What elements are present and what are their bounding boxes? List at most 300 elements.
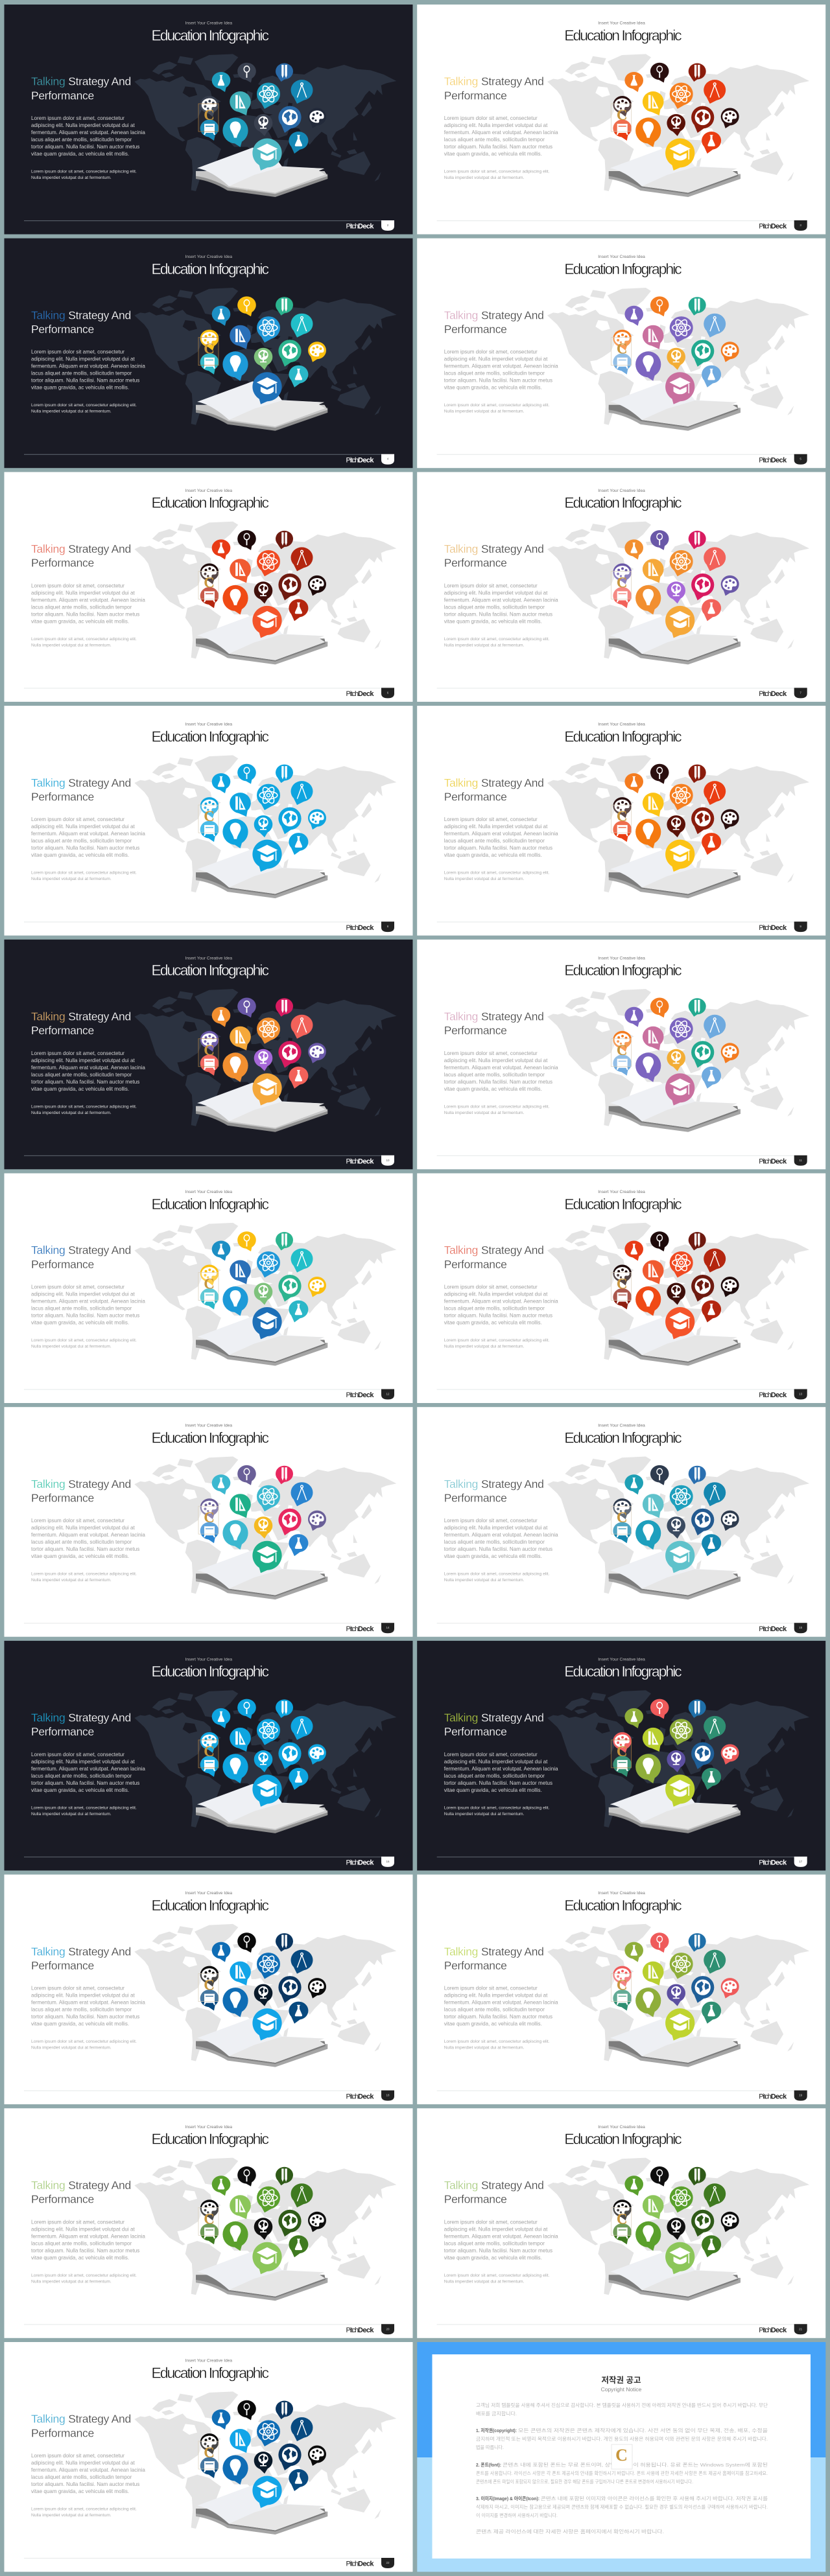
slide 8: white, red-yellow palette bbox=[417, 706, 825, 936]
icon: book bbox=[609, 849, 741, 898]
subheading: Performance bbox=[444, 1959, 507, 1972]
page badge bbox=[794, 2324, 807, 2334]
brand: Deck bbox=[771, 1625, 787, 1633]
slide 15: dark, sky blue palette bbox=[4, 1641, 412, 1870]
body text: adipiscing elit. Nulla imperdiet volutpat dui at bbox=[444, 1993, 548, 1999]
page badge bbox=[794, 922, 807, 932]
icon: compass bbox=[704, 80, 726, 104]
icon: flask bbox=[624, 1240, 643, 1261]
icon: book bbox=[609, 2017, 741, 2067]
subheading: Performance bbox=[444, 1725, 507, 1738]
icon: small globe bbox=[667, 1049, 685, 1071]
title: Education Infographic bbox=[564, 2131, 682, 2148]
icon: palette bbox=[613, 1966, 632, 1987]
icon: graduation cap bbox=[252, 1541, 282, 1573]
icon: pencils bbox=[276, 998, 293, 1017]
body text: vitae quam gravida, ac vehicula elit mollis. bbox=[444, 1787, 542, 1793]
body text: vitae quam gravida, ac vehicula elit mollis. bbox=[444, 2021, 542, 2027]
icon: canvas bbox=[200, 2223, 219, 2244]
copyright clause 1: 법을 따릅니다. bbox=[476, 2444, 504, 2450]
body text: Lorem ipsum dolor sit amet, consectetur bbox=[444, 1986, 538, 1991]
body text: lacus aliquet ante mollis, sollicitudin tempor bbox=[31, 604, 132, 610]
watermark: C bbox=[204, 1743, 215, 1759]
note text: Nulla imperdiet volutpat dui at fermentum. bbox=[444, 2279, 525, 2284]
page badge bbox=[381, 688, 394, 698]
body text: fermentum. Aliquam erat volutpat. Aenean lacinia bbox=[444, 1766, 558, 1772]
watermark bbox=[198, 1506, 219, 1534]
icon: palette bbox=[613, 330, 632, 351]
watermark bbox=[611, 1039, 632, 1067]
icon: flask bbox=[212, 2176, 230, 2196]
page badge bbox=[794, 454, 807, 465]
icon: globe bbox=[278, 2443, 302, 2470]
page badge bbox=[381, 220, 394, 231]
icon: globe bbox=[278, 1509, 302, 1535]
icon: book bbox=[609, 615, 741, 664]
icon: graduation cap bbox=[665, 2242, 694, 2274]
icon: flask bbox=[624, 2176, 643, 2196]
page badge: 5 bbox=[800, 458, 801, 461]
body text: fermentum. Aliquam erat volutpat. Aenean lacinia bbox=[444, 364, 558, 369]
body text: adipiscing elit. Nulla imperdiet volutpat dui at bbox=[31, 122, 135, 128]
icon: ruler bbox=[230, 1260, 251, 1284]
body text: vitae quam gravida, ac vehicula elit mollis. bbox=[444, 1086, 542, 1092]
icon: ruler bbox=[643, 1962, 664, 1986]
icon: flask bbox=[624, 306, 643, 326]
page badge bbox=[794, 2091, 807, 2101]
body text: vitae quam gravida, ac vehicula elit mollis. bbox=[31, 385, 129, 391]
world map bbox=[134, 1457, 396, 1594]
icon: ruler bbox=[643, 793, 664, 817]
title: Education Infographic bbox=[564, 1429, 682, 1446]
watermark: C bbox=[204, 1275, 215, 1292]
footer rule bbox=[24, 2558, 394, 2559]
subheading: Strategy And bbox=[68, 1010, 131, 1023]
body text: vitae quam gravida, ac vehicula elit mollis. bbox=[444, 1319, 542, 1326]
world map bbox=[547, 1457, 809, 1594]
icon: bulb bbox=[222, 819, 248, 848]
icon: magnifier bbox=[650, 998, 669, 1017]
icon: palette right bbox=[721, 1043, 739, 1063]
icon: atom bbox=[670, 1485, 693, 1511]
page badge: 22 bbox=[386, 2561, 390, 2564]
subheading: Strategy And bbox=[481, 75, 544, 88]
watermark: C bbox=[204, 341, 215, 357]
brand: Pitch bbox=[346, 223, 359, 231]
title: Education Infographic bbox=[564, 1663, 682, 1680]
copyright clause 3 bbox=[476, 2496, 768, 2518]
watermark bbox=[198, 805, 219, 833]
brand: Pitch bbox=[346, 690, 359, 698]
icon: palette right bbox=[308, 1277, 326, 1297]
brand: Pitch bbox=[759, 1625, 772, 1633]
icon: flask lower bbox=[702, 599, 721, 621]
subheading: Talking bbox=[31, 75, 65, 88]
icon: canvas bbox=[613, 587, 632, 608]
note text: Lorem ipsum dolor sit amet, consectetur adipiscing elit. bbox=[31, 1104, 137, 1109]
footer rule bbox=[437, 1155, 807, 1156]
icon: small globe bbox=[667, 348, 685, 370]
icon: bulb bbox=[635, 351, 661, 381]
icon: canvas bbox=[200, 1990, 219, 2011]
page badge: 9 bbox=[800, 925, 801, 928]
brand: Pitch bbox=[346, 2093, 359, 2100]
icon: graduation cap bbox=[252, 2008, 282, 2041]
icon: pencils bbox=[276, 297, 293, 316]
brand: Pitch bbox=[346, 1859, 359, 1867]
icon: small globe bbox=[254, 1984, 272, 2006]
subheading: Performance bbox=[444, 1024, 507, 1037]
copyright clause 1 bbox=[476, 2428, 768, 2450]
icon: atom bbox=[257, 1953, 280, 1979]
body text: tortor aliquam. Nulla facilisi. Nam auctor metus bbox=[31, 144, 139, 150]
slide 16: dark, lime-coral palette bbox=[417, 1641, 825, 1870]
brand: Pitch bbox=[346, 1158, 359, 1166]
subheading: Performance bbox=[31, 1725, 94, 1738]
small heading: Insert Your Creative Idea bbox=[598, 1891, 645, 1896]
icon: canvas bbox=[613, 1288, 632, 1309]
icon: pencils bbox=[276, 1699, 293, 1718]
watermark: C bbox=[204, 574, 215, 590]
body text: tortor aliquam. Nulla facilisi. Nam auctor metus bbox=[444, 1079, 552, 1085]
small heading: Insert Your Creative Idea bbox=[185, 1657, 232, 1662]
subheading: Strategy And bbox=[68, 75, 131, 88]
title: Education Infographic bbox=[152, 1196, 268, 1213]
icon: compass bbox=[704, 1716, 726, 1740]
icon: palette bbox=[613, 2199, 632, 2220]
body text: fermentum. Aliquam erat volutpat. Aenean lacinia bbox=[31, 130, 145, 135]
icon: atom bbox=[257, 1719, 280, 1745]
brand: Deck bbox=[771, 456, 787, 464]
body text: lacus aliquet ante mollis, sollicitudin tempor bbox=[444, 1072, 545, 1078]
icon: compass bbox=[704, 1248, 726, 1273]
subheading: Performance bbox=[31, 557, 94, 570]
icon: palette right bbox=[308, 108, 326, 128]
icon: ruler bbox=[230, 91, 251, 115]
copyright clause 3: 이 이미지를 변경하여 사용하시기 바랍니다. bbox=[476, 2512, 558, 2518]
icon: pencils bbox=[276, 2400, 293, 2419]
icon: compass bbox=[290, 1716, 313, 1740]
body text: tortor aliquam. Nulla facilisi. Nam auctor metus bbox=[444, 1313, 552, 1318]
body text: fermentum. Aliquam erat volutpat. Aenean lacinia bbox=[31, 1766, 145, 1772]
body text: fermentum. Aliquam erat volutpat. Aenean lacinia bbox=[31, 831, 145, 837]
icon: magnifier bbox=[650, 63, 669, 83]
icon: pencils bbox=[689, 1232, 706, 1251]
subheading: Talking bbox=[31, 1478, 65, 1491]
icon: pencils bbox=[689, 297, 706, 316]
subheading: Talking bbox=[31, 1010, 65, 1023]
subheading: Talking bbox=[444, 542, 478, 555]
body text: Lorem ipsum dolor sit amet, consectetur bbox=[31, 1752, 124, 1758]
icon: compass bbox=[290, 80, 313, 104]
icon: graduation cap bbox=[252, 840, 282, 872]
icon: pencils bbox=[276, 64, 293, 82]
page badge bbox=[381, 2091, 394, 2101]
brand: Pitch bbox=[759, 2093, 772, 2100]
subheading: Performance bbox=[444, 1258, 507, 1271]
small heading: Insert Your Creative Idea bbox=[598, 1424, 645, 1428]
subheading: Performance bbox=[31, 1024, 94, 1037]
icon: canvas bbox=[613, 2223, 632, 2244]
body text: Lorem ipsum dolor sit amet, consectetur bbox=[31, 583, 124, 588]
icon: flask bbox=[624, 72, 643, 92]
footer rule bbox=[24, 688, 394, 689]
icon: graduation cap bbox=[252, 1307, 282, 1339]
icon: compass bbox=[290, 2183, 313, 2207]
icon: canvas bbox=[613, 1756, 632, 1777]
body text: Lorem ipsum dolor sit amet, consectetur bbox=[31, 115, 124, 121]
page badge: 4 bbox=[387, 458, 389, 461]
subheading: Performance bbox=[31, 790, 94, 803]
icon: magnifier bbox=[237, 530, 256, 550]
icon: globe bbox=[691, 1742, 714, 1769]
body text: tortor aliquam. Nulla facilisi. Nam auctor metus bbox=[444, 611, 552, 617]
body text: adipiscing elit. Nulla imperdiet volutpat dui at bbox=[31, 824, 135, 830]
brand: Pitch bbox=[759, 1859, 772, 1867]
icon: ruler bbox=[643, 91, 664, 115]
body text: vitae quam gravida, ac vehicula elit mollis. bbox=[31, 1787, 129, 1793]
body text: fermentum. Aliquam erat volutpat. Aenean lacinia bbox=[31, 2467, 145, 2473]
watermark bbox=[611, 571, 632, 599]
watermark bbox=[198, 1974, 219, 2002]
icon: compass bbox=[704, 1482, 726, 1506]
body text: tortor aliquam. Nulla facilisi. Nam auctor metus bbox=[31, 1313, 139, 1318]
subheading: Performance bbox=[31, 2426, 94, 2439]
body text: lacus aliquet ante mollis, sollicitudin tempor bbox=[31, 2007, 132, 2013]
watermark bbox=[611, 1506, 632, 1534]
body text: tortor aliquam. Nulla facilisi. Nam auctor metus bbox=[31, 1546, 139, 1552]
body text: Lorem ipsum dolor sit amet, consectetur bbox=[444, 1050, 538, 1056]
icon: graduation cap bbox=[665, 840, 694, 872]
body text: Lorem ipsum dolor sit amet, consectetur bbox=[444, 1518, 538, 1524]
body text: lacus aliquet ante mollis, sollicitudin tempor bbox=[31, 838, 132, 844]
icon: globe bbox=[278, 1041, 302, 1068]
body text: vitae quam gravida, ac vehicula elit mollis. bbox=[31, 151, 129, 157]
body text: lacus aliquet ante mollis, sollicitudin tempor bbox=[444, 1305, 545, 1312]
icon: book bbox=[609, 381, 741, 431]
note text: Lorem ipsum dolor sit amet, consectetur adipiscing elit. bbox=[444, 1572, 550, 1577]
subheading: Strategy And bbox=[68, 1478, 131, 1491]
icon: globe bbox=[278, 1275, 302, 1301]
subheading: Talking bbox=[31, 542, 65, 555]
small heading: Insert Your Creative Idea bbox=[185, 2125, 232, 2129]
icon: book bbox=[196, 849, 327, 898]
icon: bulb bbox=[635, 1052, 661, 1082]
watermark: C bbox=[204, 1509, 215, 1526]
page badge: 18 bbox=[386, 2094, 390, 2097]
icon: canvas bbox=[200, 1522, 219, 1543]
subheading: Talking bbox=[444, 1010, 478, 1023]
icon: ruler bbox=[230, 2429, 251, 2453]
watermark: C bbox=[617, 1743, 628, 1759]
body text: lacus aliquet ante mollis, sollicitudin tempor bbox=[31, 1773, 132, 1779]
subheading: Talking bbox=[444, 1712, 478, 1724]
world map bbox=[134, 288, 396, 425]
icon: magnifier bbox=[650, 1231, 669, 1251]
small heading: Insert Your Creative Idea bbox=[185, 1891, 232, 1896]
watermark: C bbox=[617, 808, 628, 824]
brand: Pitch bbox=[346, 1625, 359, 1633]
icon: flask bbox=[212, 306, 230, 326]
icon: flask lower bbox=[702, 1300, 721, 1322]
icon: small globe bbox=[254, 114, 272, 136]
icon: book bbox=[196, 148, 327, 197]
icon: palette bbox=[200, 1265, 219, 1286]
icon: flask bbox=[212, 539, 230, 559]
icon: canvas bbox=[200, 821, 219, 842]
slide 11: white, multicolour palette bbox=[4, 1173, 412, 1403]
world map bbox=[547, 755, 809, 892]
icon: palette bbox=[200, 1732, 219, 1753]
page badge bbox=[794, 220, 807, 231]
world map bbox=[134, 2391, 396, 2529]
world map bbox=[134, 755, 396, 892]
body text: adipiscing elit. Nulla imperdiet volutpat dui at bbox=[31, 2460, 135, 2466]
body text: vitae quam gravida, ac vehicula elit mollis. bbox=[31, 1086, 129, 1092]
subheading: Strategy And bbox=[481, 776, 544, 789]
note text: Nulla imperdiet volutpat dui at fermentum. bbox=[444, 410, 525, 414]
icon: pencils bbox=[689, 1699, 706, 1718]
copyright clause 3: 삭제하지 마시고, 이미지는 참고용으로 제공되며 콘텐츠와 함께 재배포할 수 없습니다. 필요한 경우 별도의 라이선스를 구매하여 사용하시기 바랍니다. bbox=[476, 2504, 768, 2510]
icon: compass bbox=[704, 547, 726, 571]
small heading: Insert Your Creative Idea bbox=[185, 1424, 232, 1428]
icon: ruler bbox=[230, 2195, 251, 2219]
body text: fermentum. Aliquam erat volutpat. Aenean lacinia bbox=[31, 2000, 145, 2006]
slide 4: white, purple-orange palette bbox=[417, 238, 825, 468]
icon: graduation cap bbox=[252, 1073, 282, 1106]
icon: graduation cap bbox=[665, 372, 694, 404]
icon: small globe bbox=[667, 114, 685, 136]
icon: ruler bbox=[643, 1260, 664, 1284]
icon: palette bbox=[200, 563, 219, 584]
icon: palette bbox=[200, 2433, 219, 2454]
title: Education Infographic bbox=[564, 1196, 682, 1213]
note text: Nulla imperdiet volutpat dui at fermentum. bbox=[444, 2046, 525, 2050]
brand: Pitch bbox=[759, 223, 772, 231]
body text: tortor aliquam. Nulla facilisi. Nam auctor metus bbox=[444, 144, 552, 150]
brand: Pitch bbox=[346, 456, 359, 464]
subheading: Talking bbox=[444, 1945, 478, 1958]
subheading: Talking bbox=[444, 1244, 478, 1257]
small heading: Insert Your Creative Idea bbox=[598, 21, 645, 26]
icon: pencils bbox=[689, 2167, 706, 2185]
brand: Pitch bbox=[346, 1391, 359, 1399]
watermark bbox=[198, 2207, 219, 2235]
footer rule bbox=[437, 1389, 807, 1390]
page badge bbox=[794, 688, 807, 698]
note text: Lorem ipsum dolor sit amet, consectetur adipiscing elit. bbox=[444, 871, 550, 876]
watermark bbox=[611, 338, 632, 366]
icon: flask lower bbox=[289, 2002, 308, 2024]
body text: vitae quam gravida, ac vehicula elit mollis. bbox=[444, 852, 542, 858]
icon: pencils bbox=[689, 1933, 706, 1952]
copyright clause 2: 폰트를 사용합니다. 라이선스 사항은 각 폰트 제공사의 안내를 확인하시기 바랍니다. 폰트 사용에 관한 자세한 사항은 폰트 제공사 홈페이지를 참고하세요. bbox=[476, 2470, 768, 2476]
icon: ruler bbox=[643, 325, 664, 349]
slide 9: dark, orange-magenta palette bbox=[4, 940, 412, 1169]
subheading: Performance bbox=[31, 1258, 94, 1271]
brand: Pitch bbox=[759, 924, 772, 932]
icon: graduation cap bbox=[252, 139, 282, 170]
body text: lacus aliquet ante mollis, sollicitudin tempor bbox=[31, 2474, 132, 2480]
world map bbox=[547, 2158, 809, 2295]
title: Education Infographic bbox=[152, 1897, 268, 1914]
icon: canvas bbox=[613, 1522, 632, 1543]
footer rule bbox=[24, 220, 394, 221]
icon: small globe bbox=[254, 2218, 272, 2240]
note text: Lorem ipsum dolor sit amet, consectetur adipiscing elit. bbox=[444, 2273, 550, 2278]
page badge: 12 bbox=[386, 1392, 390, 1396]
icon: globe bbox=[691, 1041, 714, 1068]
brand: Deck bbox=[358, 924, 374, 932]
watermark bbox=[611, 1273, 632, 1300]
body text: fermentum. Aliquam erat volutpat. Aenean lacinia bbox=[444, 1532, 558, 1538]
icon: compass bbox=[704, 1015, 726, 1039]
icon: flask lower bbox=[702, 2002, 721, 2024]
icon: palette bbox=[200, 1498, 219, 1519]
icon: small globe bbox=[254, 1750, 272, 1772]
note text: Lorem ipsum dolor sit amet, consectetur adipiscing elit. bbox=[31, 2039, 137, 2044]
title: Education Infographic bbox=[564, 27, 682, 43]
brand: Pitch bbox=[759, 1391, 772, 1399]
title: Education Infographic bbox=[152, 2131, 268, 2148]
subheading: Talking bbox=[31, 1712, 65, 1724]
body text: Lorem ipsum dolor sit amet, consectetur bbox=[444, 1284, 538, 1290]
body text: tortor aliquam. Nulla facilisi. Nam auctor metus bbox=[31, 2014, 139, 2020]
page badge bbox=[381, 1389, 394, 1400]
page badge bbox=[381, 454, 394, 465]
body text: vitae quam gravida, ac vehicula elit mollis. bbox=[31, 1553, 129, 1559]
body text: lacus aliquet ante mollis, sollicitudin tempor bbox=[31, 137, 132, 143]
small heading: Insert Your Creative Idea bbox=[185, 1190, 232, 1194]
body text: adipiscing elit. Nulla imperdiet volutpat dui at bbox=[31, 1759, 135, 1765]
icon: bulb bbox=[222, 2222, 248, 2251]
small heading: Insert Your Creative Idea bbox=[598, 1657, 645, 1662]
brand: Deck bbox=[771, 690, 787, 698]
icon: canvas bbox=[613, 821, 632, 842]
subheading: Strategy And bbox=[481, 1945, 544, 1958]
icon: ruler bbox=[643, 1494, 664, 1518]
icon: small globe bbox=[667, 1984, 685, 2006]
subheading: Strategy And bbox=[68, 1945, 131, 1958]
world map bbox=[547, 522, 809, 658]
brand: Deck bbox=[358, 2093, 374, 2100]
icon: magnifier bbox=[650, 764, 669, 784]
subheading: Talking bbox=[31, 308, 65, 321]
subheading: Talking bbox=[31, 1244, 65, 1257]
watermark bbox=[611, 2207, 632, 2235]
title: Education Infographic bbox=[564, 1897, 682, 1914]
icon: palette bbox=[613, 96, 632, 117]
subheading: Strategy And bbox=[68, 2179, 131, 2192]
icon: pencils bbox=[276, 2167, 293, 2185]
icon: bulb bbox=[222, 1520, 248, 1549]
slide 12: white, red-black palette bbox=[417, 1173, 825, 1403]
icon: flask lower bbox=[702, 1067, 721, 1089]
icon: graduation cap bbox=[665, 606, 694, 638]
icon: graduation cap bbox=[252, 2476, 282, 2508]
brand: Pitch bbox=[346, 2560, 359, 2568]
icon: magnifier bbox=[237, 296, 256, 316]
footer rule bbox=[437, 2324, 807, 2325]
icon: palette right bbox=[721, 108, 739, 128]
icon: palette right bbox=[308, 809, 326, 830]
slide 13: white, aqua-pink palette bbox=[4, 1407, 412, 1637]
icon: palette right bbox=[721, 342, 739, 362]
icon: bulb bbox=[635, 1988, 661, 2017]
title: Education Infographic bbox=[152, 27, 268, 43]
icon: atom bbox=[257, 83, 280, 109]
copyright clause 2 bbox=[476, 2462, 768, 2485]
